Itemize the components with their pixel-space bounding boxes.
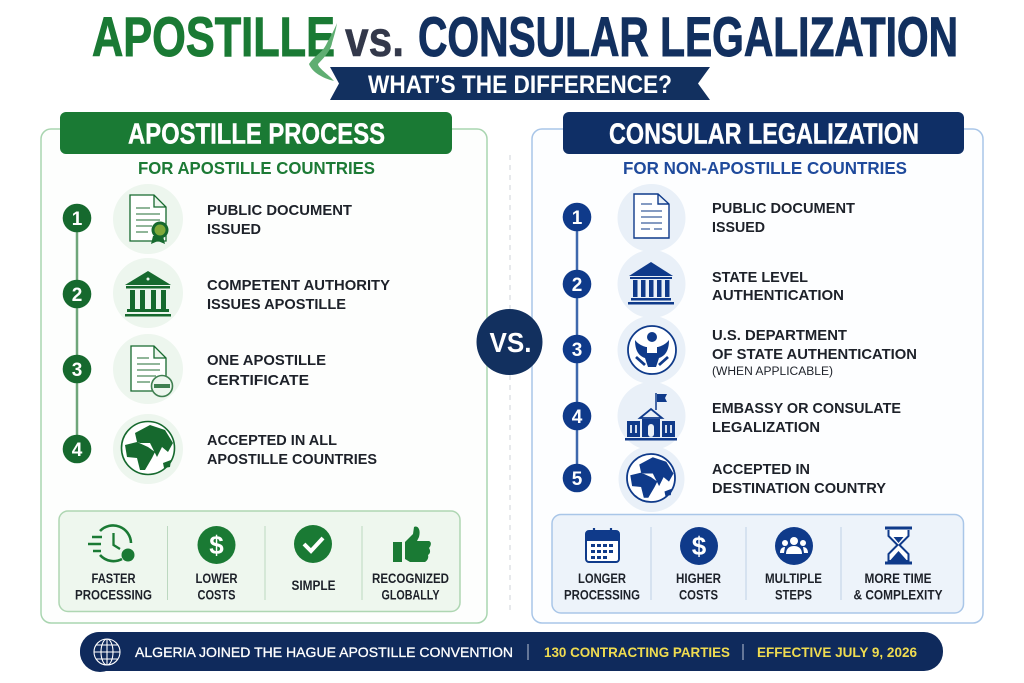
benefit: higher costs: COSTS <box>679 588 718 602</box>
subheading: for apostille countries: FOR APOSTILLE COUNTRIES <box>138 158 375 178</box>
step text: left 1 <box>207 202 352 238</box>
vs badge: VS. <box>490 327 532 358</box>
benefit: longer processing: PROCESSING <box>564 588 640 602</box>
icon: green globe <box>113 414 183 484</box>
timeline: left steps: 4 <box>72 440 83 461</box>
step text: right 3: OF STATE AUTHENTICATION <box>712 346 917 363</box>
timeline: right steps: 5 <box>572 469 583 490</box>
title: vs. <box>345 11 404 67</box>
benefit: lower costs: $ <box>209 530 224 560</box>
benefit: lower costs: LOWER <box>196 571 238 586</box>
title <box>92 5 958 68</box>
center divider <box>509 155 511 610</box>
step text: left 2: COMPETENT AUTHORITY <box>207 277 390 294</box>
benefit: higher costs: $ <box>692 531 707 561</box>
timeline: right steps: 3 <box>572 340 582 361</box>
step text: right 4: EMBASSY OR CONSULATE <box>712 400 901 417</box>
heading: apostille process: APOSTILLE PROCESS <box>128 118 385 150</box>
footer stat: parties: 130 CONTRACTING PARTIES <box>544 644 730 660</box>
benefit: multiple steps: MULTIPLE <box>765 571 822 586</box>
benefit: recognized globally: GLOBALLY <box>382 588 440 602</box>
footer text: ALGERIA JOINED THE HAGUE APOSTILLE CONVENTION <box>135 644 513 660</box>
footer stat: date: EFFECTIVE JULY 9, 2026 <box>757 644 917 660</box>
benefit: more time and complexity: MORE TIME <box>864 571 932 586</box>
benefit: more time and complexity: & COMPLEXITY <box>854 588 942 602</box>
step text: right 1 <box>712 200 855 236</box>
step text: right 4: LEGALIZATION <box>712 419 820 436</box>
title: APOSTILLE <box>92 5 335 68</box>
panel: consular legalization <box>532 112 983 623</box>
step text: right 4 <box>712 400 901 436</box>
step text: right 3 <box>712 327 917 378</box>
step text: left 3 <box>207 352 326 389</box>
step text: right 2: AUTHENTICATION <box>712 287 844 304</box>
benefit: simple <box>292 525 336 593</box>
footer banner <box>80 632 943 672</box>
benefit: faster processing: FASTER <box>92 571 136 586</box>
benefit: more time and complexity <box>854 528 942 602</box>
benefit: lower costs: COSTS <box>198 588 236 602</box>
step text: left 4: APOSTILLE COUNTRIES <box>207 451 377 468</box>
icon: government building <box>113 258 183 328</box>
benefit: longer processing <box>564 528 640 602</box>
timeline: left steps <box>63 204 91 463</box>
step text: left 3: CERTIFICATE <box>207 372 309 389</box>
vs badge <box>476 309 542 375</box>
step text: right 3: (WHEN APPLICABLE) <box>712 366 833 378</box>
icon: footer globe <box>94 639 120 665</box>
timeline: right steps: 2 <box>572 275 582 296</box>
step text: left 3: ONE APOSTILLE <box>207 352 326 369</box>
step text: left 4: ACCEPTED IN ALL <box>207 432 337 449</box>
benefit: higher costs: HIGHER <box>676 571 721 586</box>
benefit: multiple steps: STEPS <box>775 588 812 602</box>
timeline: right steps: 1 <box>572 208 583 229</box>
step text: right 5: DESTINATION COUNTRY <box>712 480 886 497</box>
benefit: higher costs <box>676 527 721 602</box>
step text: right 1: PUBLIC DOCUMENT <box>712 200 855 217</box>
timeline: left steps: 1 <box>72 209 83 230</box>
heading: consular legalization: CONSULAR LEGALIZATION <box>609 118 919 150</box>
step text: right 1: ISSUED <box>712 219 765 236</box>
benefit: faster processing <box>75 525 152 602</box>
benefit: simple: SIMPLE <box>292 578 336 593</box>
heading: apostille process <box>60 112 452 154</box>
icon: certificate with stamp <box>113 334 183 404</box>
step text: left 2 <box>207 277 390 313</box>
icon: blue globe <box>618 446 684 512</box>
benefit: multiple steps <box>765 527 822 602</box>
benefits panel: apostille <box>59 511 460 612</box>
timeline: right steps <box>563 203 591 492</box>
timeline: right steps: 4 <box>572 407 583 428</box>
benefit: longer processing: LONGER <box>578 571 626 586</box>
step text: right 3: U.S. DEPARTMENT <box>712 327 847 344</box>
subtitle ribbon: WHAT’S THE DIFFERENCE? <box>368 71 672 99</box>
benefits panel: consular <box>552 514 964 613</box>
panel: apostille process <box>41 112 487 623</box>
benefit: lower costs <box>196 526 238 602</box>
step text: left 4 <box>207 432 377 468</box>
step text: right 2: STATE LEVEL <box>712 269 808 286</box>
heading: consular legalization <box>563 112 964 154</box>
step text: right 5 <box>712 461 886 497</box>
step text: right 5: ACCEPTED IN <box>712 461 810 478</box>
step text: right 2 <box>712 269 844 304</box>
benefit: faster processing: PROCESSING <box>75 588 152 602</box>
subheading: for non-apostille countries: FOR NON-APOSTILLE COUNTRIES <box>623 158 907 178</box>
benefit: recognized globally <box>372 527 449 602</box>
icon: department of state seal <box>618 316 686 384</box>
icon: state building <box>618 250 686 318</box>
timeline: left steps: 3 <box>72 360 82 381</box>
icon: document with seal <box>113 184 183 254</box>
icon: green ribbon swoosh <box>309 23 337 81</box>
benefit: recognized globally: RECOGNIZED <box>372 571 449 586</box>
icon: embassy <box>618 382 686 450</box>
icon: document <box>618 184 686 252</box>
step text: left 1: ISSUED <box>207 221 261 238</box>
step text: left 2: ISSUES APOSTILLE <box>207 296 346 313</box>
step text: left 1: PUBLIC DOCUMENT <box>207 202 352 219</box>
timeline: left steps: 2 <box>72 285 82 306</box>
